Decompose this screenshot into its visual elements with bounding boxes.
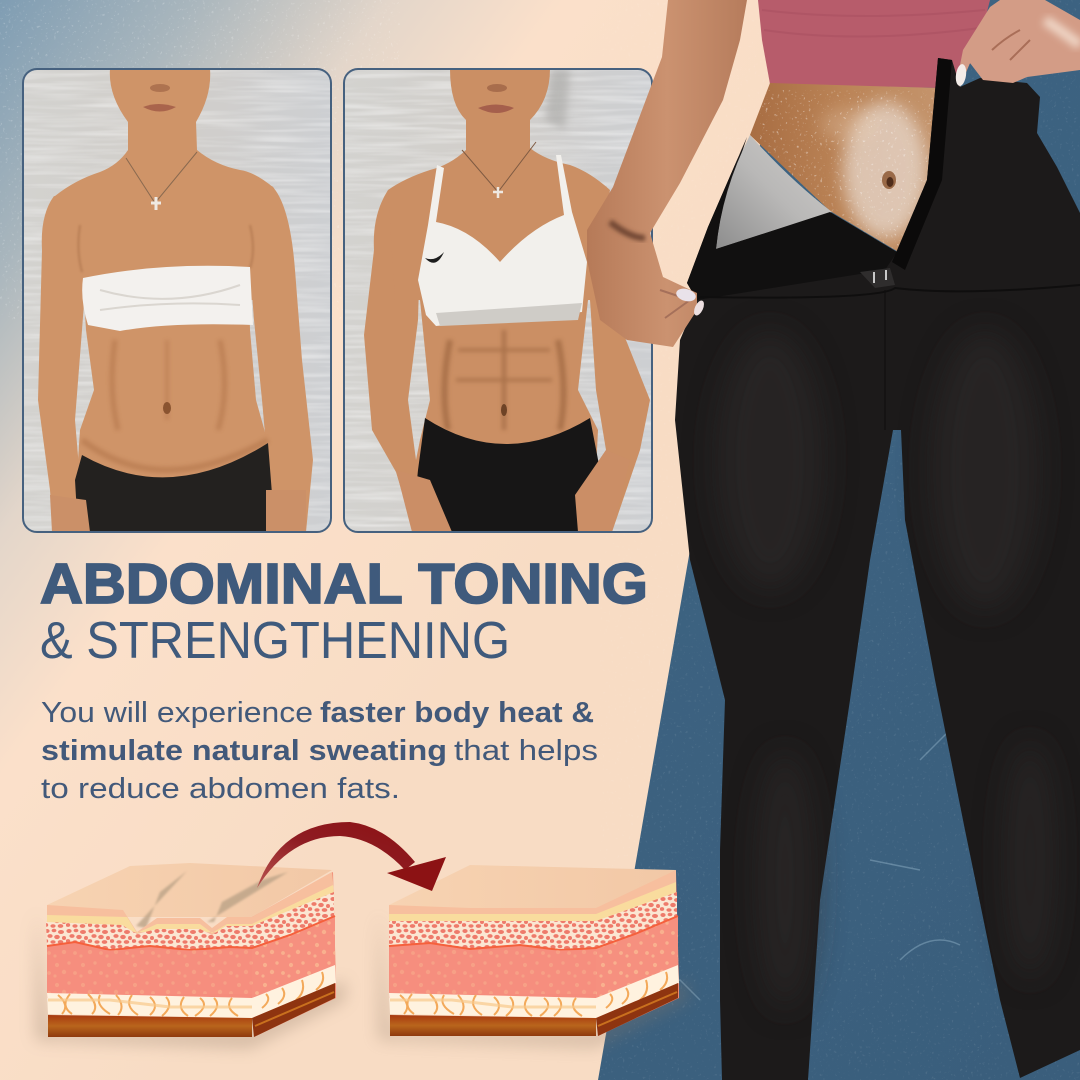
- arrow between skin blocks: [257, 822, 446, 891]
- dermis side: [252, 916, 335, 998]
- hands: [396, 450, 630, 532]
- left arm: [38, 196, 84, 499]
- body copy line two: that helps: [454, 735, 598, 767]
- leggings body: [675, 58, 1080, 1080]
- left arm: [364, 190, 419, 488]
- dermis front: [389, 943, 596, 998]
- wrist shadow: [610, 222, 645, 238]
- model wearing sauna leggings: [587, 0, 1080, 1080]
- left nails: [675, 287, 697, 303]
- right arm: [248, 186, 313, 532]
- black shorts: [412, 418, 606, 532]
- logo swoosh on bra: [425, 252, 444, 263]
- top surface smooth: [389, 865, 676, 917]
- abdominal definition: [444, 330, 564, 430]
- muscle layer: [48, 1015, 252, 1037]
- pink crop top: [758, 0, 990, 88]
- heading line two: & STRENGTHENING: [40, 612, 510, 670]
- neck, head and chest: [55, 69, 274, 300]
- dent shading: [136, 871, 288, 928]
- after photo frame: [344, 69, 652, 532]
- navel: [882, 171, 896, 189]
- side face: [252, 872, 336, 1037]
- sweat sheen: [760, 90, 940, 250]
- hair shadow: [545, 69, 570, 130]
- heading line one: ABDOMINAL TONING: [40, 552, 648, 616]
- block shadow: [36, 910, 345, 1048]
- before photo frame: [23, 69, 331, 532]
- fat layer: [47, 965, 336, 1018]
- cellular layer: [389, 892, 677, 952]
- right arm: [590, 186, 650, 531]
- before photo: [23, 69, 331, 532]
- body copy: [41, 697, 598, 805]
- body copy line two: stimulate natural sweating: [41, 735, 447, 767]
- yellow layer: [47, 885, 334, 933]
- yellow layer: [389, 882, 676, 930]
- folded waistband: [687, 137, 897, 300]
- heading: [40, 552, 648, 670]
- body copy line three: to reduce abdomen fats.: [41, 773, 400, 805]
- black shorts: [75, 443, 275, 532]
- body copy line one: faster body heat &: [320, 697, 594, 729]
- necklace: [126, 152, 197, 203]
- after photo: [344, 69, 652, 532]
- abdomen shading: [82, 340, 268, 470]
- side face: [596, 872, 679, 1036]
- silver inner lining: [716, 135, 832, 249]
- hands: [50, 490, 275, 531]
- right nail: [955, 63, 967, 87]
- navel: [163, 402, 171, 414]
- block shadow: [378, 910, 688, 1048]
- leggings sheen: [715, 330, 1056, 1010]
- silver peek under hand: [647, 290, 680, 322]
- underarm creases: [78, 225, 253, 272]
- skin block: after: [378, 865, 688, 1048]
- peach layer: [47, 872, 334, 935]
- right hand: [957, 0, 1080, 87]
- skin block: before: [36, 863, 345, 1048]
- white sports bra: [418, 155, 587, 326]
- hook closure: [860, 268, 895, 288]
- muscle layer: [390, 1015, 596, 1036]
- navel: [501, 404, 507, 416]
- left arm and hand: [587, 0, 747, 347]
- bare midriff: [750, 83, 940, 253]
- body copy line one: You will experience: [41, 697, 313, 729]
- zip strip: [892, 58, 952, 270]
- cellular layer: [46, 892, 334, 952]
- torso: [414, 300, 598, 470]
- fat layer: [389, 965, 679, 1018]
- facial features: [143, 104, 176, 112]
- facial features: [478, 104, 514, 113]
- peach layer: [389, 870, 676, 935]
- white bandeau: [82, 266, 253, 331]
- dermis front: [47, 942, 252, 998]
- neck, head and chest: [388, 69, 610, 300]
- torso: [78, 314, 266, 478]
- top surface: [47, 863, 332, 917]
- necklace: [462, 142, 536, 192]
- dermis side: [596, 916, 678, 998]
- waistband seam: [700, 285, 1080, 298]
